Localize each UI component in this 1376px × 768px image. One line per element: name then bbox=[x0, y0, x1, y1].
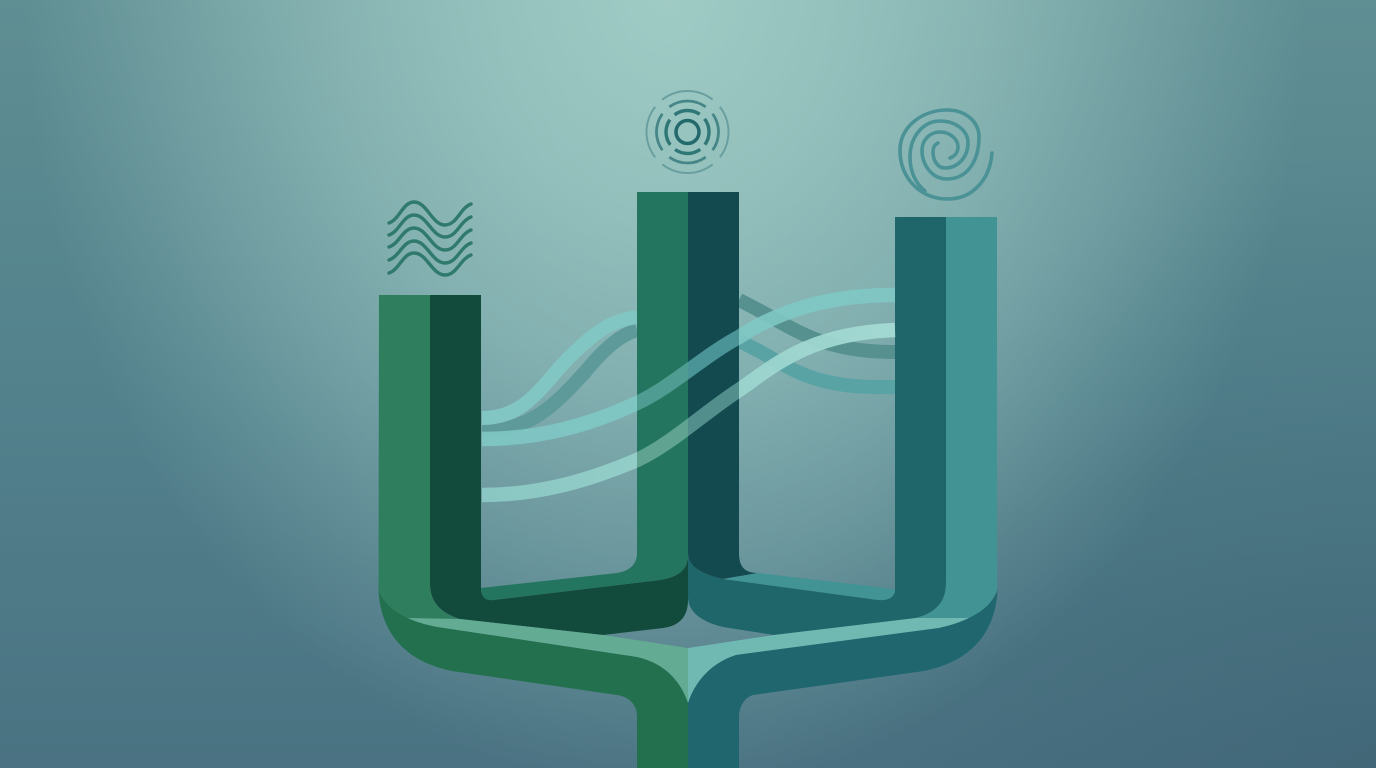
left lower band highlight bbox=[405, 618, 688, 703]
spiral channel: right column bbox=[688, 192, 998, 768]
icon: waves bbox=[389, 202, 471, 275]
ribbon C bbox=[482, 295, 895, 439]
icon: concentric signal rings bbox=[646, 91, 728, 173]
left column light face bbox=[378, 295, 460, 619]
left column dark face bbox=[430, 295, 688, 635]
right column dark face bbox=[688, 217, 946, 635]
ribbons behind the columns bbox=[482, 300, 895, 431]
left lower channel bbox=[378, 590, 688, 768]
right lower band highlight bbox=[688, 618, 973, 703]
middle column dark face bbox=[688, 192, 758, 579]
right inner strip bbox=[723, 573, 895, 600]
trident diagram bbox=[378, 90, 998, 768]
ribbon D bbox=[482, 330, 895, 495]
wave channel: left column bbox=[378, 192, 688, 768]
ribbons crossing the columns bbox=[482, 295, 895, 495]
right column light face bbox=[916, 217, 997, 618]
right lower channel bbox=[688, 590, 998, 768]
left inner strip bbox=[481, 192, 688, 600]
icon: spiral bbox=[900, 110, 992, 199]
